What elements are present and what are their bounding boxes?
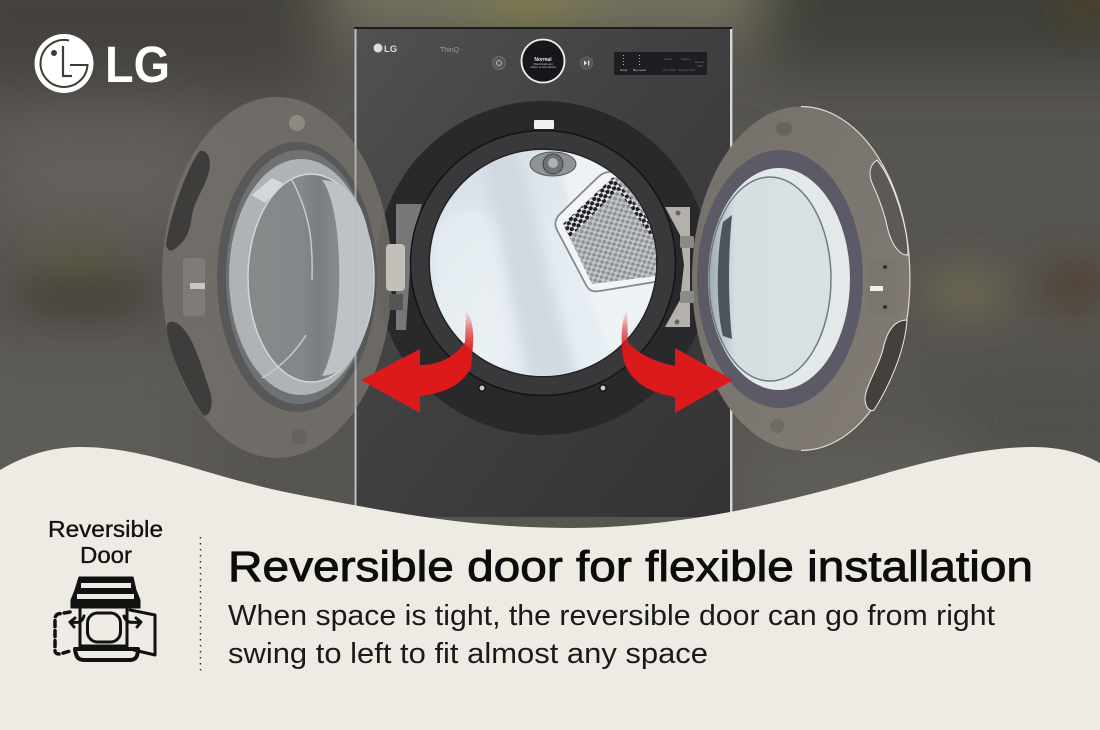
left door latch xyxy=(183,258,205,316)
body text xyxy=(228,600,995,670)
left door glass reflections xyxy=(252,178,283,203)
icon: reversible door dryer xyxy=(55,577,155,660)
right door xyxy=(692,106,910,450)
right door knobs xyxy=(770,122,792,433)
door latch xyxy=(534,120,554,129)
left door knobs xyxy=(289,115,307,444)
option display: Low Static xyxy=(663,68,677,72)
right door glass xyxy=(708,168,850,390)
drum recess xyxy=(376,101,710,435)
left hinge plate xyxy=(396,204,422,330)
drum baffle shading xyxy=(480,150,578,380)
body text: When space is tight, the reversible door can go from right xyxy=(228,600,995,632)
feature label: Door xyxy=(80,542,132,568)
red arrow: right xyxy=(622,310,733,413)
left door hinge bracket xyxy=(386,244,405,310)
option display: Options xyxy=(681,57,691,61)
option display: Energy Saver xyxy=(679,68,696,72)
cream wave panel xyxy=(0,447,1100,730)
left door gasket xyxy=(217,142,377,412)
grille holes xyxy=(563,178,656,284)
drum ring xyxy=(410,130,676,396)
feature label xyxy=(48,516,163,568)
ThinQ label: ThinQ xyxy=(440,47,460,54)
open door xyxy=(130,610,155,655)
dryer top highlights xyxy=(77,583,134,599)
door edge over left door xyxy=(354,29,356,517)
panel LG logo: LG xyxy=(384,44,397,55)
logo emblem xyxy=(34,34,94,93)
left door handle slots xyxy=(166,151,210,251)
power button xyxy=(492,56,506,70)
option display: Remote xyxy=(695,60,705,64)
control panel xyxy=(374,40,707,82)
red arrow: left xyxy=(361,310,473,413)
LG logo xyxy=(34,34,170,93)
logo wordmark: LG xyxy=(105,36,170,93)
option display: Temp xyxy=(620,68,628,72)
dashed door outline xyxy=(55,612,70,654)
drum screws xyxy=(479,385,606,391)
right door latch xyxy=(868,259,895,314)
dryer base xyxy=(75,649,138,660)
left door glass xyxy=(229,159,373,395)
option display: Dry Level xyxy=(633,68,646,72)
right hinge plate xyxy=(665,207,690,327)
left door (translucent, overlapping the dryer) xyxy=(162,97,392,458)
dial display: Mixed loads and xyxy=(534,62,553,66)
right door hinge pins xyxy=(680,236,694,303)
body text: swing to left to fit almost any space xyxy=(228,638,708,670)
dial display xyxy=(522,40,564,82)
blurred background xyxy=(0,0,1100,530)
start button xyxy=(580,57,592,69)
feature label: Reversible xyxy=(48,516,163,542)
option display: Start xyxy=(697,64,703,68)
dryer body xyxy=(80,609,127,646)
swing arrows xyxy=(70,616,84,627)
option display xyxy=(614,52,707,75)
dryer top xyxy=(71,577,140,608)
right door gasket xyxy=(697,150,863,408)
dial display: Normal xyxy=(534,57,552,63)
drum sensor xyxy=(530,152,576,176)
grille plate xyxy=(554,171,656,292)
drum interior xyxy=(430,150,656,376)
dotted divider xyxy=(200,537,202,673)
dial display: cottons or linen fabrics xyxy=(530,65,557,69)
background blobs xyxy=(10,0,1100,314)
option display: Steam xyxy=(664,57,673,61)
panel LG logo xyxy=(374,44,397,55)
dryer body xyxy=(354,27,732,517)
right door handle slots xyxy=(870,160,908,255)
heading: Reversible door for flexible installation xyxy=(228,543,1033,591)
